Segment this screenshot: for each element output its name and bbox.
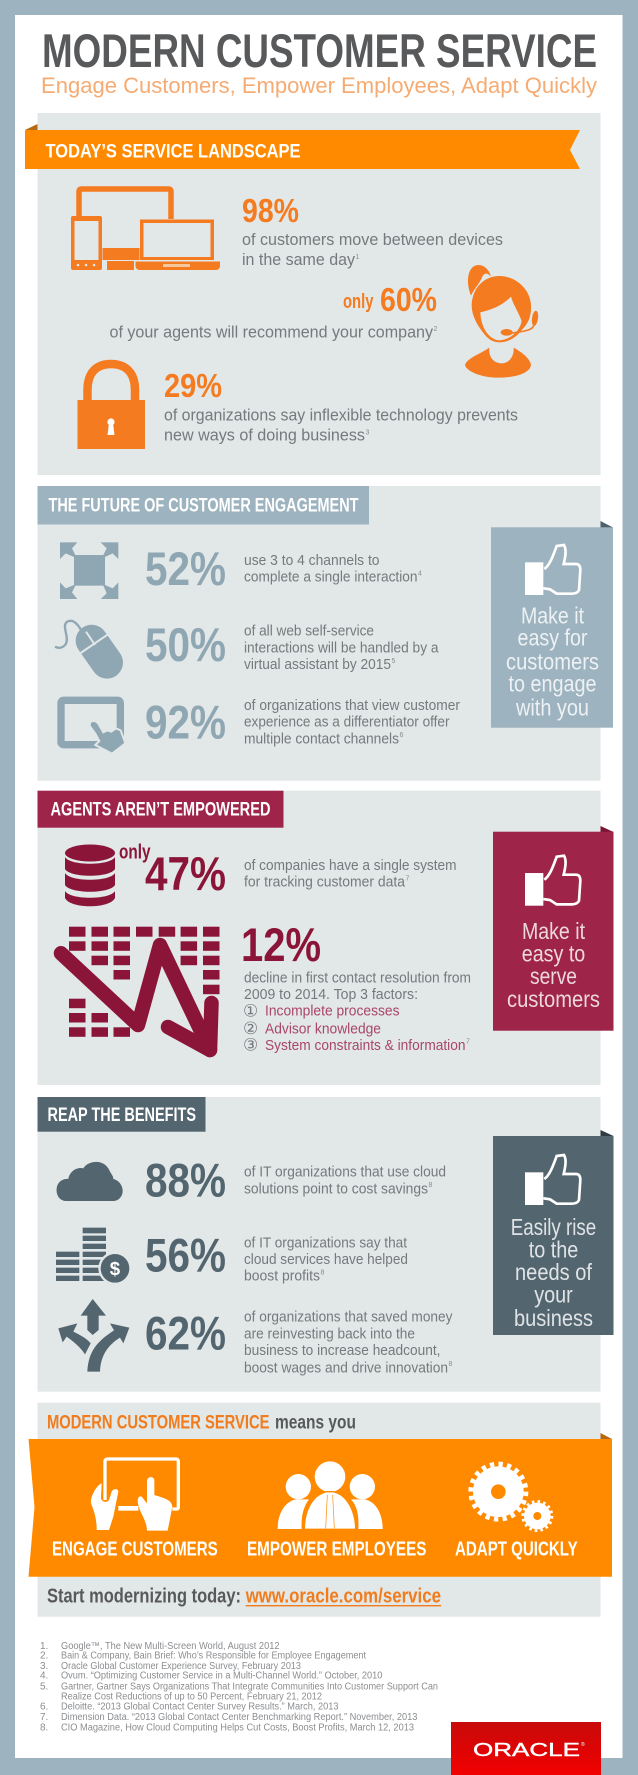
stat: 29%: of organizations say inflexible technology prevents	[164, 407, 518, 425]
stat: 52%	[145, 542, 422, 595]
callout: make it easy for customers	[491, 521, 613, 728]
footnotes: CIO Magazine, How Cloud Computing Helps Cut Costs, Boost Profits, March 12, 2013	[61, 1723, 414, 1734]
panel: reap the benefits	[38, 1097, 614, 1392]
stat: 98%	[242, 192, 503, 269]
stat: 50%: virtual assistant by 2015	[244, 657, 391, 673]
stat: 52%: 4	[418, 570, 422, 578]
stat: 56%	[145, 1229, 408, 1285]
stat: 62%	[145, 1306, 453, 1376]
stat: 56%: 56%	[145, 1229, 226, 1282]
heading: means you	[275, 1412, 356, 1433]
chart: falling arrow over grid	[61, 927, 220, 1050]
stat: 62%: of organizations that saved money	[244, 1310, 453, 1326]
icon: database	[65, 844, 115, 906]
stat: only 60%: 60%	[380, 281, 437, 318]
icon: three employees	[278, 1461, 383, 1529]
callout: make it easy for customers: with you	[515, 695, 589, 721]
stat: 12%: 2009 to 2014. Top 3 factors:	[244, 987, 418, 1003]
stat: 56%: of IT organizations say that	[244, 1235, 407, 1251]
footnotes: Realize Cost Reductions of up to 50 Percent, February 21, 2012	[61, 1692, 322, 1703]
oracle logo	[451, 1722, 601, 1775]
footnotes: Gartner, Gartner Says Organizations That Integrate Communities Into Customer Support Can	[61, 1681, 438, 1692]
stat: 50%: 5	[392, 658, 396, 665]
footnotes: 2.	[40, 1651, 48, 1662]
footnotes: Dimension Data. “2013 Global Contact Center Benchmarking Report.” November, 2013	[61, 1712, 418, 1723]
stat: 56%: boost profits	[244, 1269, 320, 1285]
list: top 3 factors: ③	[243, 1036, 258, 1056]
heading: MODERN CUSTOMER SERVICE	[47, 1412, 270, 1433]
banner heading: TODAY’S SERVICE LANDSCAPE	[46, 142, 300, 162]
callout: easily rise: needs of	[515, 1259, 593, 1285]
stat: only 47%: only	[119, 841, 151, 863]
footnotes: 8.	[40, 1723, 48, 1734]
section heading	[38, 791, 284, 828]
icon: hands on tablet	[91, 1459, 178, 1531]
panel: modern customer service means you	[28, 1403, 612, 1617]
stat: 29%	[164, 367, 518, 445]
stat: only 47%: for tracking customer data	[244, 875, 406, 891]
icon: coin stacks: $	[110, 1258, 121, 1279]
callout: make it easy to serve customers: easy to	[522, 941, 585, 967]
icon: coin stacks	[56, 1228, 132, 1285]
footnotes	[40, 1641, 438, 1734]
stat: 50%: 50%	[145, 618, 226, 671]
orange band: ADAPT QUICKLY	[455, 1539, 578, 1561]
stat: 92%: 92%	[145, 695, 226, 748]
section heading	[38, 486, 369, 524]
stat: 98%: in the same day	[242, 251, 356, 269]
call to action	[47, 1586, 441, 1608]
orange band: EMPOWER EMPLOYEES	[247, 1539, 426, 1561]
stat: 92%: experience as a differentiator offer	[244, 715, 450, 731]
stat: 98%: of customers move between devices	[242, 231, 503, 249]
stat: 62%: 62%	[145, 1306, 226, 1359]
stat: 12%	[241, 918, 471, 1003]
icon: expand arrows	[60, 542, 118, 599]
stat: 88%: of IT organizations that use cloud	[244, 1165, 446, 1181]
footnotes: Bain & Company, Bain Brief: Who’s Responsible for Employee Engagement	[61, 1651, 366, 1662]
footnotes: 3.	[40, 1661, 48, 1672]
stat: 50%: interactions will be handled by a	[244, 640, 439, 656]
stat: 29%: 3	[366, 430, 370, 436]
callout: easily rise: to the	[529, 1237, 578, 1263]
stat: only 60%: of your agents will recommend your company	[110, 323, 434, 341]
callout: easily rise: business	[514, 1305, 593, 1331]
oracle logo: ®	[581, 1741, 585, 1748]
stat: 12%: decline in first contact resolution from	[244, 970, 471, 986]
panel: agents aren't empowered	[38, 791, 614, 1085]
oracle logo: ORACLE	[473, 1740, 580, 1760]
stat: 98%: 98%	[242, 192, 299, 229]
stat: only 47%: 47%	[145, 847, 226, 900]
panel: future of customer engagement	[38, 486, 613, 781]
callout: make it easy to serve customers: customers	[507, 986, 600, 1012]
stat: 98%: 1	[356, 254, 360, 261]
footnotes: Deloitte. “2013 Global Contact Center Survey Results.” March, 2013	[61, 1701, 339, 1712]
list: top 3 factors: ①	[243, 1002, 258, 1022]
footnotes: 6.	[40, 1701, 48, 1712]
list: top 3 factors: Advisor knowledge	[265, 1020, 381, 1037]
footnotes: Oracle Global Customer Experience Survey, February 2013	[61, 1661, 301, 1672]
panel: today's service landscape	[25, 113, 600, 475]
icon: gears	[471, 1464, 554, 1533]
footnotes: Google™, The New Multi-Screen World, August 2012	[61, 1641, 280, 1652]
stat: 62%: 8	[448, 1361, 452, 1368]
section heading	[38, 1097, 206, 1132]
stat: 62%: business to increase headcount,	[244, 1343, 440, 1359]
section heading: THE FUTURE OF CUSTOMER ENGAGEMENT	[48, 496, 359, 516]
stat: 50%: of all web self-service	[244, 624, 374, 640]
stat: 52%: 52%	[145, 542, 226, 595]
list: top 3 factors: ②	[243, 1019, 258, 1039]
icon: devices	[71, 189, 220, 270]
callout: make it easy to serve customers	[493, 826, 614, 1031]
stat: only 47%: of companies have a single system	[244, 858, 456, 874]
orange band: ENGAGE CUSTOMERS	[52, 1539, 218, 1561]
stat: 29%: 29%	[164, 367, 222, 404]
stat: 52%: complete a single interaction	[244, 570, 418, 586]
list: top 3 factors	[243, 1002, 470, 1056]
callout: make it easy for customers: Make it	[521, 602, 585, 628]
icon: cloud	[57, 1162, 123, 1201]
subtitle: Engage Customers, Empower Employees, Adapt Quickly	[41, 73, 598, 98]
stat: 92%: 6	[400, 732, 404, 739]
list: top 3 factors: 7	[466, 1038, 470, 1046]
stat: 88%: 8	[428, 1182, 432, 1189]
title	[41, 25, 598, 98]
callout: easily rise: your	[534, 1282, 573, 1308]
footnotes: Ovum. “Optimizing Customer Service in a Multi-Channel World.” October, 2010	[61, 1671, 383, 1682]
icon: diverging arrows	[58, 1299, 129, 1372]
callout: make it easy to serve customers: serve	[530, 963, 577, 989]
stat: 52%: use 3 to 4 channels to	[244, 553, 380, 569]
section heading: REAP THE BENEFITS	[48, 1105, 196, 1126]
stat: 92%: of organizations that view customer	[244, 698, 460, 714]
stat: 56%: cloud services have helped	[244, 1252, 408, 1268]
stat: 88%	[145, 1154, 446, 1207]
stat: only 60%	[110, 281, 438, 341]
icon: touch tablet	[61, 700, 125, 754]
icon: thumbs up	[525, 545, 580, 595]
stat: 62%: are reinvesting back into the	[244, 1326, 415, 1342]
icon: thumbs up	[525, 1155, 580, 1205]
stat: 88%: 88%	[145, 1154, 226, 1207]
stat: 50%	[145, 618, 439, 673]
list: top 3 factors: Incomplete processes	[265, 1003, 400, 1020]
stat: only 47%: 7	[406, 876, 410, 882]
stat: only 60%: 2	[434, 326, 438, 333]
stat: 92%: multiple contact channels	[244, 731, 399, 747]
icon: mouse	[55, 618, 129, 685]
call to action: Start modernizing today:	[47, 1586, 241, 1608]
orange band	[28, 1433, 612, 1577]
callout: make it easy for customers: customers	[506, 648, 599, 674]
footnotes: 1.	[40, 1641, 48, 1652]
stat: 88%: solutions point to cost savings	[244, 1181, 428, 1197]
stat: only 60%: only	[343, 291, 374, 313]
footnotes: 4.	[40, 1671, 48, 1682]
stat: 12%: 12%	[241, 918, 321, 971]
callout: make it easy for customers: easy for	[518, 625, 588, 651]
stat: 62%: boost wages and drive innovation	[244, 1360, 448, 1376]
icon: padlock	[78, 364, 145, 449]
callout: make it easy to serve customers: Make it	[522, 918, 586, 944]
stat: only 47%	[119, 841, 456, 900]
stat: 92%	[145, 695, 460, 748]
call to action: www.oracle.com/service	[245, 1586, 441, 1608]
footnotes: 5.	[40, 1681, 48, 1692]
callout: easily rise: Easily rise	[511, 1214, 596, 1240]
stat: 56%: 8	[320, 1270, 324, 1276]
section heading: AGENTS AREN’T EMPOWERED	[50, 800, 270, 821]
list: top 3 factors: System constraints & information	[265, 1037, 466, 1054]
banner heading	[25, 124, 580, 169]
callout: make it easy for customers: to engage	[508, 671, 596, 697]
stat: 29%: new ways of doing business	[164, 427, 365, 445]
icon: thumbs up	[525, 856, 580, 906]
callout: easily rise	[493, 1130, 614, 1335]
icon: agent with headset	[465, 265, 539, 378]
footnotes: 7.	[40, 1712, 48, 1723]
